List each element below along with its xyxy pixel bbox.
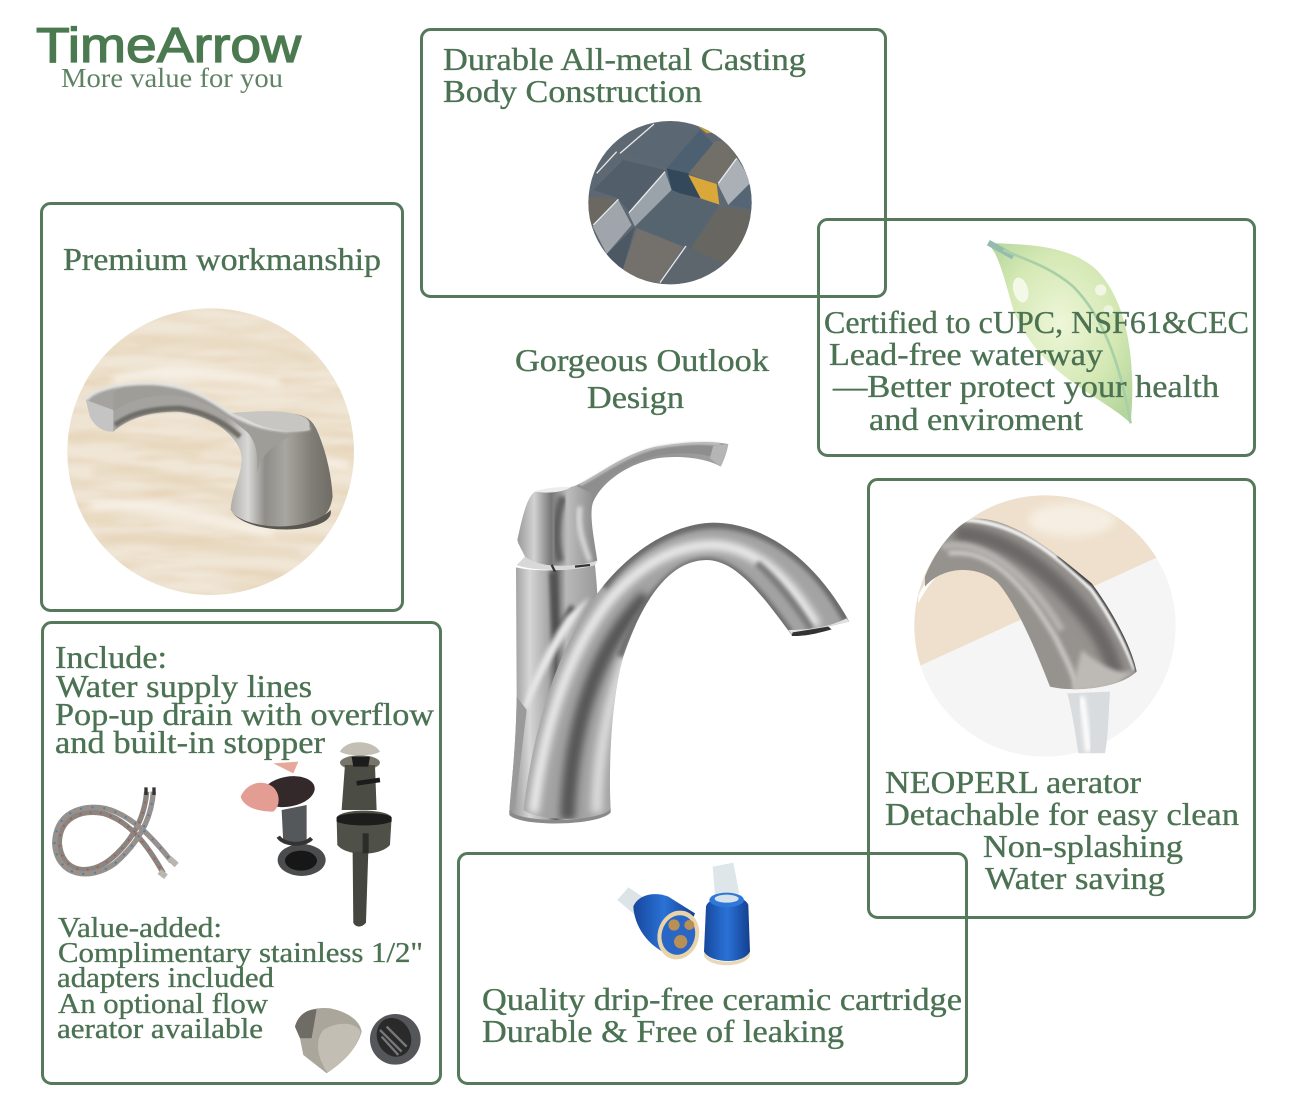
panel: ceramic cartridge <box>458 854 966 1084</box>
heading: gorgeous outlook design <box>515 342 769 415</box>
panel: certification <box>818 220 1254 456</box>
icon: flow aerator <box>370 1012 421 1065</box>
text: value-added items <box>57 912 423 1045</box>
text: certification details <box>824 304 1249 437</box>
text: aerator features: Detachable for easy clean <box>885 796 1239 832</box>
text: certification details: —Better protect your health <box>832 368 1219 404</box>
text: included items <box>55 639 434 760</box>
spout <box>524 522 850 819</box>
heading: casting construction: Durable All-metal Casting <box>443 41 806 77</box>
text: aerator features: NEOPERL aerator <box>885 764 1141 800</box>
logo: TimeArrow <box>36 19 302 93</box>
text: included items: and built-in stopper <box>55 724 325 760</box>
text: included items: Include: <box>55 639 167 675</box>
heading: premium workmanship: Premium workmanship <box>63 241 381 277</box>
text: cartridge benefits: Durable & Free of leaking <box>482 1013 844 1049</box>
icon: braided water supply lines <box>55 787 177 877</box>
text: aerator features: Water saving <box>985 860 1165 896</box>
logo: TimeArrow: TimeArrow <box>36 19 302 73</box>
panel: included accessories <box>42 622 440 1084</box>
text: value-added items: Value-added: <box>58 912 222 944</box>
text: value-added items: An optional flow <box>58 988 268 1020</box>
text: aerator features: Non-splashing <box>983 828 1183 864</box>
text: aerator features <box>885 764 1239 896</box>
icon: drain stopper assembly <box>337 742 392 927</box>
handle <box>517 442 728 572</box>
text: value-added items: aerator available <box>57 1013 263 1045</box>
image: faucet lever on marble <box>67 308 354 595</box>
panel: aerator <box>868 480 1254 918</box>
heading: gorgeous outlook design: Design <box>587 379 684 415</box>
image: spout with flowing water <box>905 490 1185 760</box>
text: certification details: Certified to cUPC, NSF61&CEC <box>824 304 1249 340</box>
text: cartridge benefits: Quality drip-free ceramic cartridge <box>482 981 962 1017</box>
text: value-added items: adapters included <box>57 962 275 994</box>
text: included items: Pop-up drain with overflow <box>55 696 434 732</box>
text: value-added items: Complimentary stainless 1/2" <box>58 937 423 969</box>
text: certification details: and enviroment <box>869 401 1083 437</box>
heading: casting construction <box>443 41 806 109</box>
heading: casting construction: Body Construction <box>443 73 702 109</box>
image: brushed nickel faucet <box>509 442 857 827</box>
image: ceramic cartridges <box>617 863 750 965</box>
logo: TimeArrow: More value for you <box>61 63 284 93</box>
image: faceted metal circle <box>588 121 752 284</box>
icon: green leaf <box>988 243 1132 423</box>
icon: stainless adapter <box>295 1008 362 1073</box>
text: included items: Water supply lines <box>56 668 312 704</box>
heading: gorgeous outlook design: Gorgeous Outlook <box>515 342 769 378</box>
icon: pop-up drain in use <box>241 762 326 876</box>
panel: premium workmanship <box>42 204 402 610</box>
panel: all-metal casting body <box>422 30 886 296</box>
text: certification details: Lead-free waterway <box>829 336 1103 372</box>
text: cartridge benefits <box>482 981 962 1049</box>
